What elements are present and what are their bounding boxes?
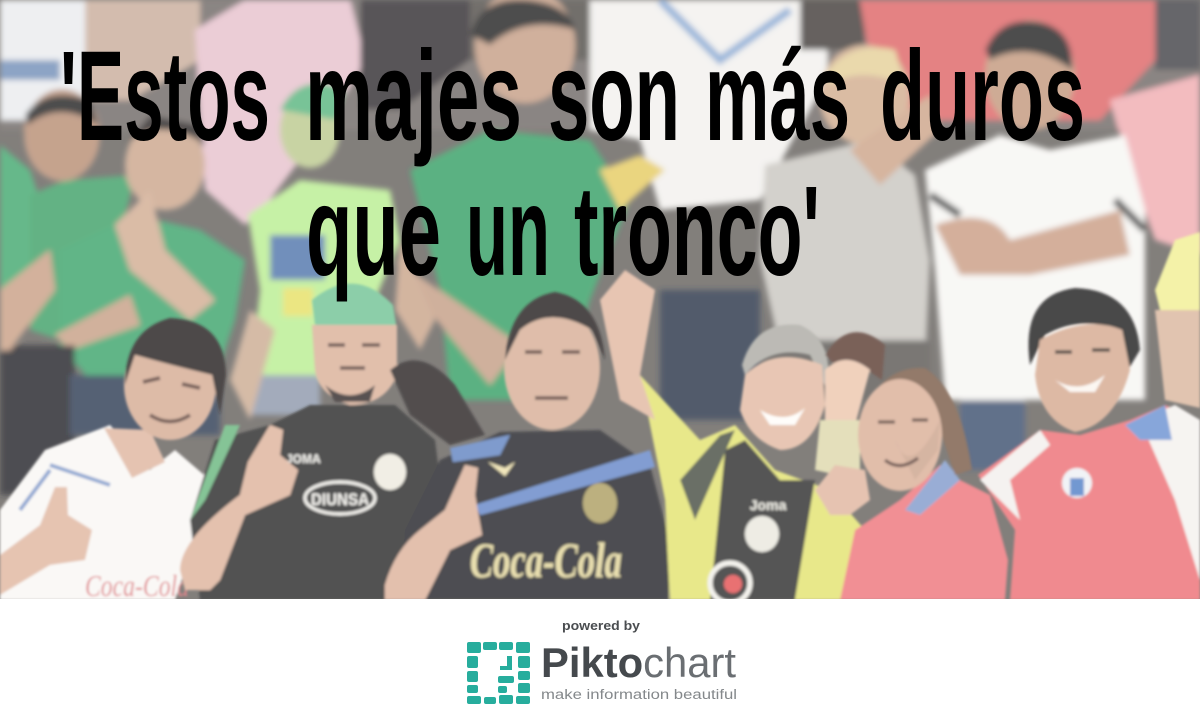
fan: white shirt, far left: Coca-Cola [85, 568, 189, 603]
title: más [705, 25, 850, 168]
real madrid white shirt [925, 135, 1145, 400]
title [60, 25, 1085, 303]
left green shirts [0, 145, 39, 290]
title: majes [305, 25, 522, 168]
fan: black Diunsa shirt: JOMA [286, 452, 321, 466]
tagline: make information beautiful [541, 687, 737, 702]
fan: man in red jersey, far right [978, 288, 1200, 600]
powered by label: powered by [562, 619, 640, 633]
right edge yellow shirt [1155, 232, 1200, 310]
fan: white shirt, far left [0, 318, 226, 603]
title: 'Estos [60, 25, 270, 168]
fan: black Coca-Cola shirt [385, 292, 672, 600]
fan: black Diunsa shirt [180, 284, 445, 600]
fan: woman in red jersey [815, 368, 1008, 600]
dark jeans [660, 290, 760, 420]
gray shirt man [760, 140, 930, 365]
girl behind with brown hair [815, 332, 885, 480]
woman behind, dark hair [390, 360, 485, 445]
wordmark: Piktochart [541, 639, 736, 686]
fan: black Coca-Cola shirt: Coca-Cola [470, 532, 622, 588]
title: son [548, 25, 680, 168]
fan: yellow and black jersey with gray cap: Joma [750, 497, 786, 513]
footer: powered by Piktochart [467, 619, 737, 704]
kid with light green shirt [248, 180, 400, 380]
icon: Piktochart logo [467, 642, 530, 704]
title: tronco' [574, 160, 820, 303]
man in green shirt [410, 130, 630, 400]
fan: yellow and black jersey with gray cap [600, 270, 865, 603]
back row of the crowd [0, 0, 1200, 495]
title: un [466, 160, 550, 303]
front row of fans [0, 232, 1200, 603]
title: que [306, 160, 441, 303]
fan: black Diunsa shirt: DIUNSA [311, 490, 369, 509]
